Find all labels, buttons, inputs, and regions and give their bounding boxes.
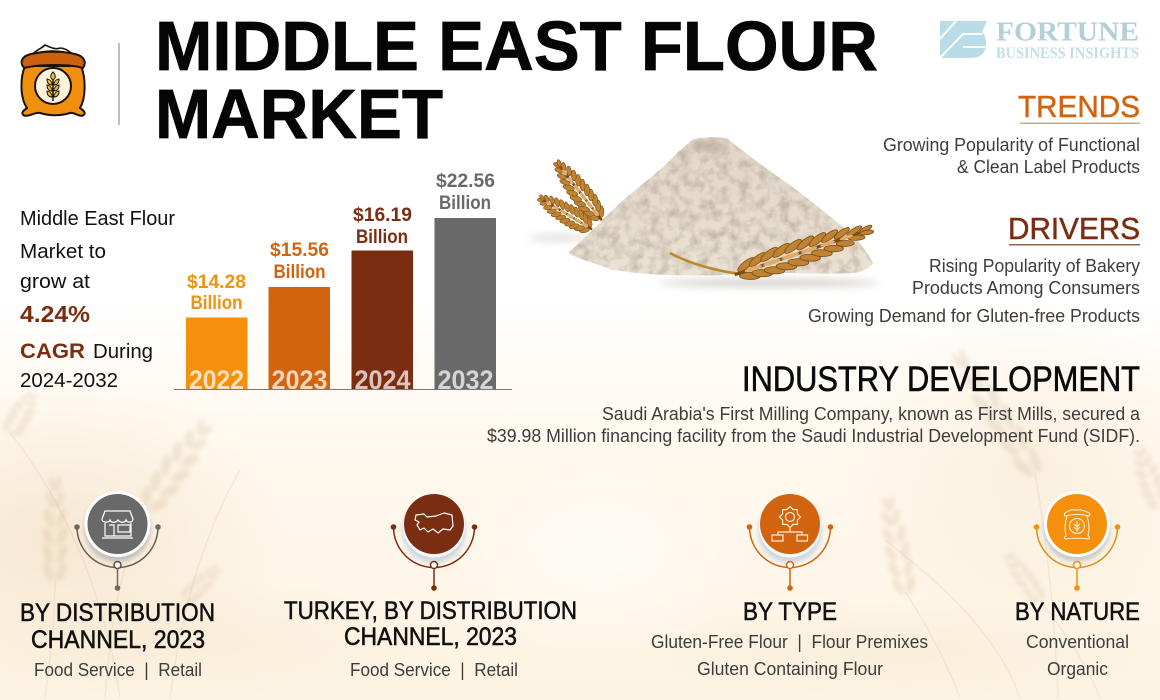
segment: by nature (1015, 491, 1140, 679)
bar 2024: 2024 (354, 365, 410, 395)
bar 2032: Billion (439, 193, 491, 214)
panel: trends: TRENDS (1018, 89, 1140, 124)
panel: industry development: Saudi Arabia's First Milling Company, known as First Mills, secured a (602, 403, 1141, 424)
segment: by type (651, 494, 928, 679)
bar 2022: 2022 (189, 365, 244, 395)
bar 2022 (186, 272, 248, 395)
panel: industry development: $39.98 Million financing facility from the Saudi Industrial Development Fund (SIDF). (487, 425, 1140, 446)
bar 2024 (352, 205, 413, 395)
heading: BY NATURE (1015, 598, 1140, 626)
text: categories (651, 631, 928, 679)
logo: Fortune Business Insights: FORTUNE (996, 16, 1139, 46)
text: categories (1026, 631, 1129, 679)
bar 2023 (268, 240, 330, 395)
title (155, 7, 878, 153)
segment: by distribution channel (20, 491, 215, 680)
text: market growth statement: Middle East Flour (20, 208, 175, 230)
text: categories: Conventional (1026, 631, 1129, 652)
panel: drivers: DRIVERS (1008, 211, 1140, 246)
heading: BY TYPE (743, 598, 837, 626)
title: MIDDLE EAST FLOUR (155, 7, 878, 85)
panel: drivers: Products Among Consumers (912, 277, 1140, 298)
icon: gear hierarchy badge (747, 494, 833, 591)
text: categories: Food Service | Retail (350, 659, 518, 680)
text: market growth statement: 4.24% (20, 301, 90, 327)
bar chart: market size (174, 171, 512, 395)
panel: industry development (487, 360, 1141, 446)
text: market growth statement: 2024-2032 (20, 370, 118, 392)
logo: Fortune Business Insights (940, 16, 1139, 62)
text: market growth statement: CAGR (20, 340, 85, 363)
icon: flour sack logo (21, 45, 85, 116)
bar 2024: $16.19 (353, 205, 412, 226)
bar 2022: $14.28 (187, 272, 246, 293)
panel: trends: & Clean Label Products (957, 156, 1140, 177)
text: categories: Gluten Containing Flour (697, 658, 883, 679)
text: categories: Organic (1047, 658, 1108, 679)
bar 2023: $15.56 (270, 240, 329, 261)
icon: storefront badge (74, 491, 161, 591)
bar 2024: Billion (356, 227, 408, 248)
heading (20, 599, 215, 654)
text: categories: Food Service | Retail (34, 659, 202, 680)
heading (284, 597, 577, 651)
heading: CHANNEL, 2023 (31, 626, 205, 654)
bar 2032: $22.56 (436, 171, 495, 192)
panel: drivers (808, 211, 1141, 326)
bar 2032 (434, 171, 496, 395)
image: flour pile with wheat (528, 137, 880, 289)
segment: Turkey by distribution channel (284, 494, 577, 680)
icon: sack badge (1034, 491, 1120, 591)
text: market growth statement: During (93, 341, 153, 363)
text: categories: Gluten-Free Flour | Flour Premixes (651, 631, 928, 652)
title: MARKET (155, 75, 443, 153)
heading: TURKEY, BY DISTRIBUTION (284, 597, 577, 625)
text: market growth statement: Market to (20, 241, 106, 263)
bar 2023: 2023 (272, 365, 328, 395)
bar 2022: Billion (190, 293, 242, 314)
bar 2032: 2032 (438, 365, 494, 395)
icon: Turkey map badge (391, 494, 477, 591)
panel: drivers: Rising Popularity of Bakery (929, 255, 1141, 276)
heading: BY DISTRIBUTION (20, 599, 215, 627)
logo: Fortune Business Insights: BUSINESS INSIGHTS (996, 45, 1139, 62)
panel: trends (883, 89, 1140, 177)
heading: CHANNEL, 2023 (344, 623, 517, 651)
title divider (118, 43, 120, 125)
panel: drivers: Growing Demand for Gluten-free Products (808, 305, 1140, 326)
text: market growth statement (20, 208, 175, 392)
bar 2023: Billion (274, 262, 326, 283)
panel: trends: Growing Popularity of Functional (883, 134, 1140, 155)
text: market growth statement: grow at (20, 271, 90, 293)
